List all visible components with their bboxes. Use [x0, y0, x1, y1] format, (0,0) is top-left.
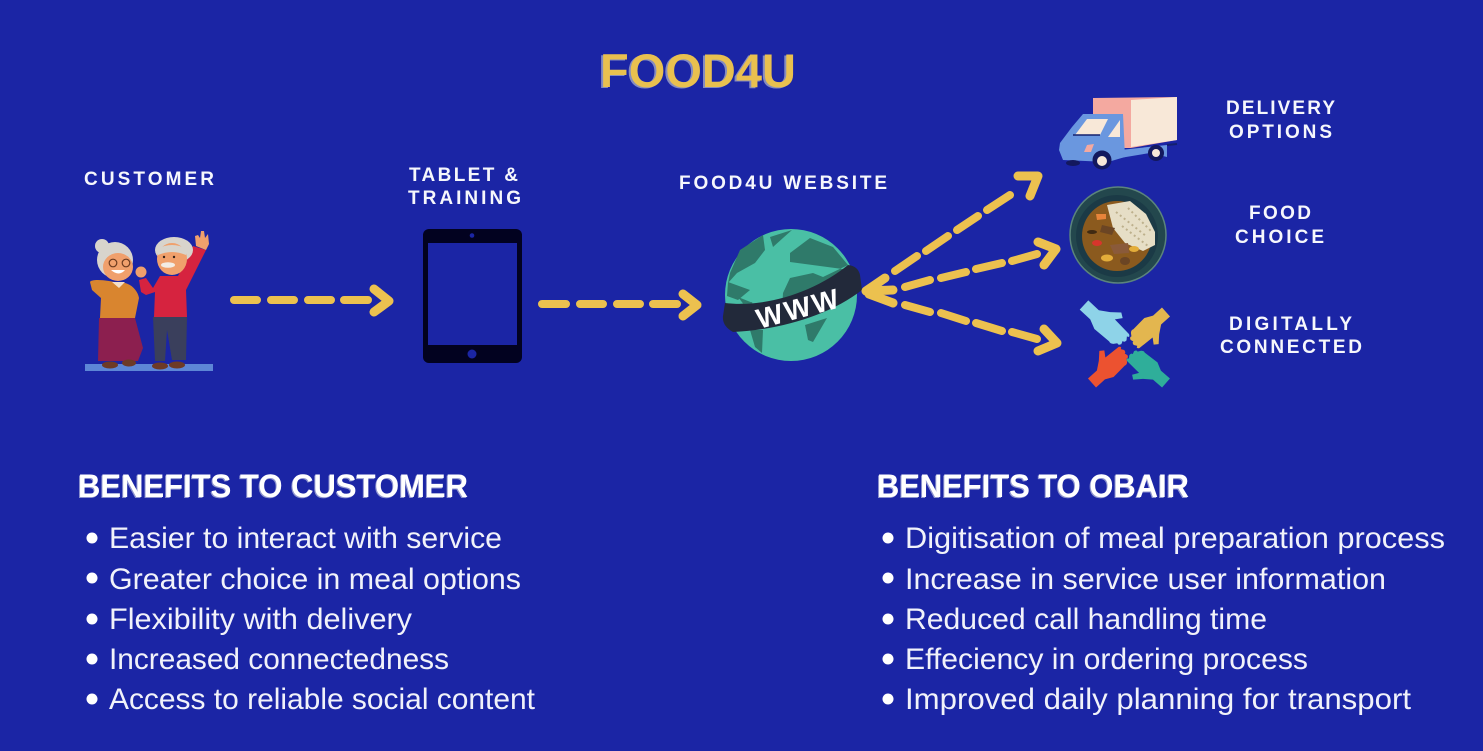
list: benefits to obair: Effeciency in ordering process	[905, 643, 1308, 676]
label: delivery options: OPTIONS	[1229, 122, 1332, 143]
arrow: website to delivery options	[895, 176, 1038, 271]
list: benefits to customer: Increased connectedness	[109, 643, 449, 676]
label: customer: CUSTOMER	[84, 169, 214, 190]
heading: benefits to customer: BENEFITS TO CUSTOMER	[78, 468, 468, 504]
icon: four hands	[1077, 290, 1179, 397]
list: benefits to customer: Easier to interact with service	[109, 522, 502, 555]
arrow tails at globe	[866, 278, 893, 303]
label: tablet and training: TRAINING	[408, 188, 521, 209]
list: benefits to obair: Improved daily planning for transport	[905, 683, 1412, 716]
icon: elderly couple	[85, 231, 213, 371]
label: digitally connected: DIGITALLY	[1229, 314, 1352, 335]
arrow: tablet to website	[542, 294, 697, 316]
label: tablet and training: TABLET &	[409, 165, 518, 186]
list: benefits to obair: Digitisation of meal preparation process	[905, 522, 1445, 555]
hand: light blue	[1077, 290, 1138, 350]
arrow: customer to tablet	[234, 289, 389, 312]
hand: yellow	[1125, 305, 1179, 357]
hand: red	[1079, 338, 1133, 390]
icon: delivery truck	[1059, 97, 1177, 170]
list: benefits to customer: Flexibility with delivery	[109, 603, 412, 636]
list: benefits to customer: Greater choice in meal options	[109, 563, 521, 596]
label: food choice: FOOD	[1249, 203, 1311, 224]
label: tablet and training	[408, 165, 521, 209]
title: FOOD4U	[600, 44, 796, 97]
label: food4u website: FOOD4U WEBSITE	[679, 173, 887, 194]
arrow: website to digitally connected	[905, 305, 1057, 351]
arrow: website to food choice	[905, 242, 1056, 287]
label: delivery options	[1226, 98, 1335, 143]
icon: tablet	[423, 229, 522, 363]
heading: benefits to obair: BENEFITS TO OBAIR	[877, 468, 1189, 504]
list: benefits to obair: Increase in service user information	[905, 563, 1386, 596]
label: digitally connected	[1220, 314, 1362, 358]
hand: teal	[1119, 345, 1173, 397]
label: food choice	[1235, 203, 1324, 248]
icon: plate of food	[1070, 187, 1166, 283]
list: benefits to customer	[86, 522, 536, 716]
label: food choice: CHOICE	[1235, 227, 1324, 248]
label: digitally connected: CONNECTED	[1220, 337, 1362, 358]
icon: globe with www band	[723, 229, 862, 361]
list: benefits to obair	[882, 522, 1445, 716]
label: delivery options: DELIVERY	[1226, 98, 1335, 119]
list: benefits to obair: Reduced call handling time	[905, 603, 1267, 636]
icon: globe with www band: WWW	[753, 283, 843, 335]
list: benefits to customer: Access to reliable social content	[109, 683, 536, 716]
